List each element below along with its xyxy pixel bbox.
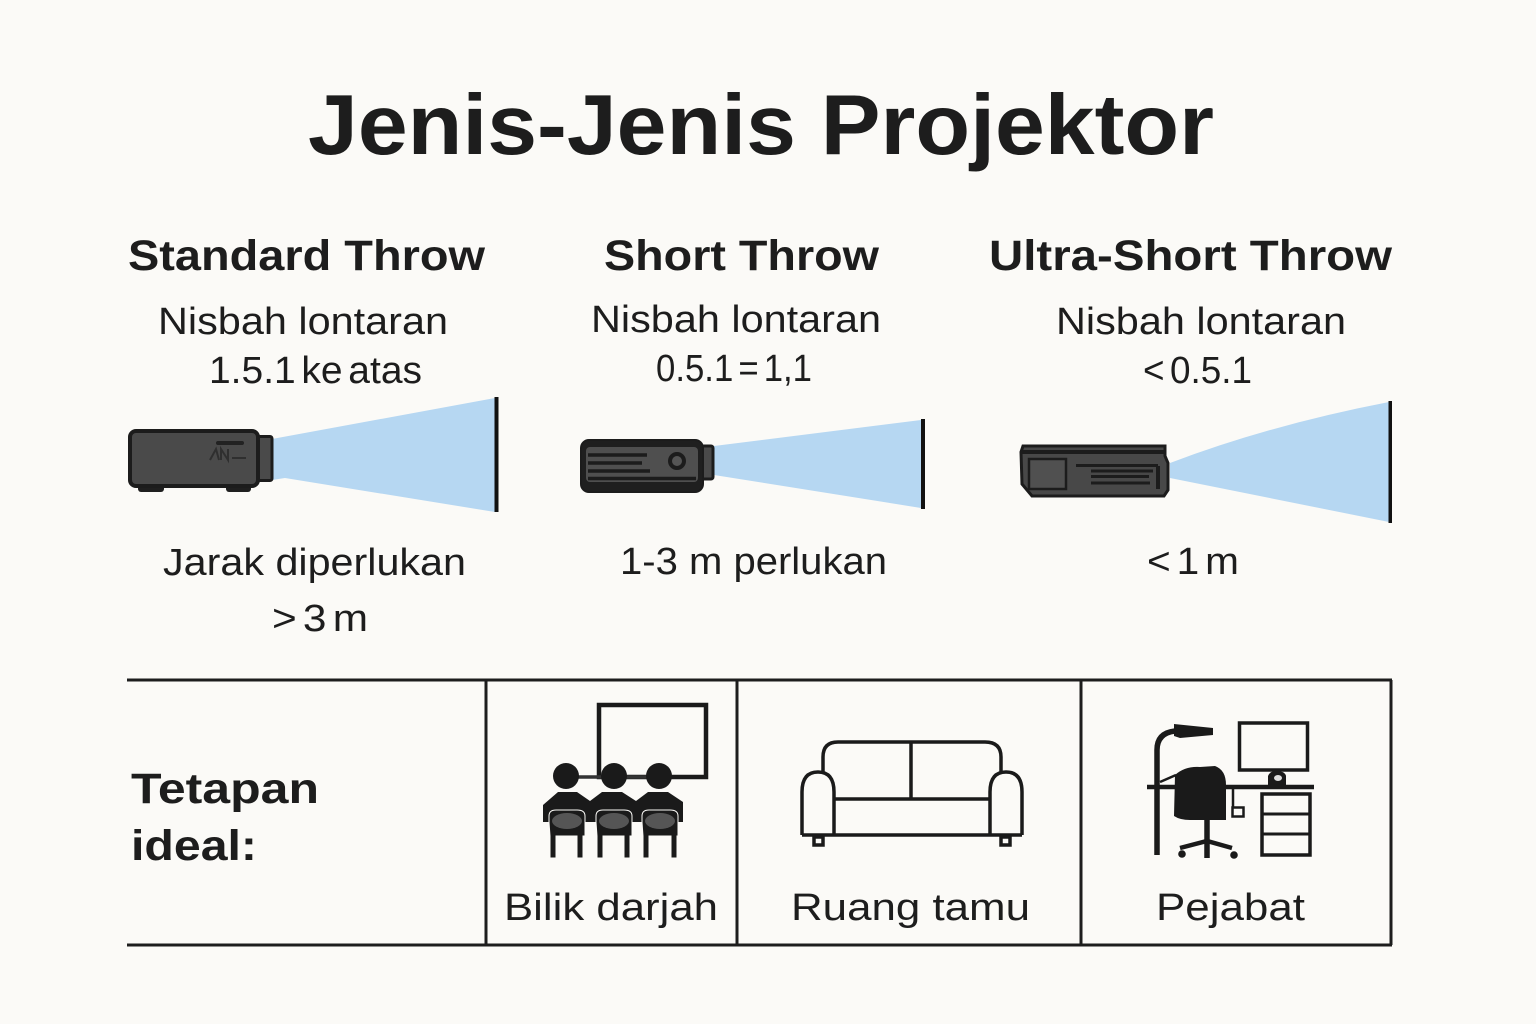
text: distance ultra-short: < 1 m xyxy=(1147,541,1239,583)
icon: office xyxy=(1147,723,1314,859)
text: distance short: 1-3 m perlukan xyxy=(620,541,887,583)
panel: ultra-short throw xyxy=(989,232,1393,583)
label: ideal settings: ideal: xyxy=(131,822,257,870)
diagram: standard projector and beam xyxy=(130,397,498,512)
table grid xyxy=(127,680,1392,945)
text: throw ratio short: Nisbah lontaran xyxy=(591,299,881,341)
label: living room: Ruang tamu xyxy=(791,887,1030,929)
diagram: ultra-short projector and beam xyxy=(1021,401,1392,523)
panel: standard throw xyxy=(128,232,498,640)
heading: ultra-short throw: Ultra-Short Throw xyxy=(989,232,1393,280)
text: throw ratio ultra-short: < 0.5.1 xyxy=(1143,350,1252,392)
text: throw ratio short xyxy=(591,299,881,390)
panel: short throw xyxy=(581,232,925,583)
text: throw ratio short: 0.5.1 = 1,1 xyxy=(656,348,812,390)
text: throw ratio standard xyxy=(158,301,448,392)
text: distance standard: > 3 m xyxy=(272,598,368,640)
text: throw ratio standard: Nisbah lontaran xyxy=(158,301,448,343)
heading: short throw: Short Throw xyxy=(604,232,880,280)
icon: classroom xyxy=(543,705,706,858)
text: throw ratio ultra-short xyxy=(1056,301,1346,392)
table: ideal settings xyxy=(127,680,1392,945)
diagram: short projector and beam xyxy=(581,419,925,509)
text: throw ratio standard: 1.5.1 ke atas xyxy=(209,350,422,392)
label: office: Pejabat xyxy=(1156,887,1306,929)
icon: sofa xyxy=(802,742,1022,845)
text: throw ratio ultra-short: Nisbah lontaran xyxy=(1056,301,1346,343)
label: classroom: Bilik darjah xyxy=(504,887,718,929)
title: Jenis-Jenis Projektor xyxy=(308,78,1214,173)
heading: standard throw: Standard Throw xyxy=(128,232,486,280)
label: ideal settings: Tetapan xyxy=(131,765,319,813)
text: distance standard: Jarak diperlukan xyxy=(163,542,466,584)
text: distance standard xyxy=(163,542,466,640)
label: ideal settings xyxy=(131,765,319,870)
